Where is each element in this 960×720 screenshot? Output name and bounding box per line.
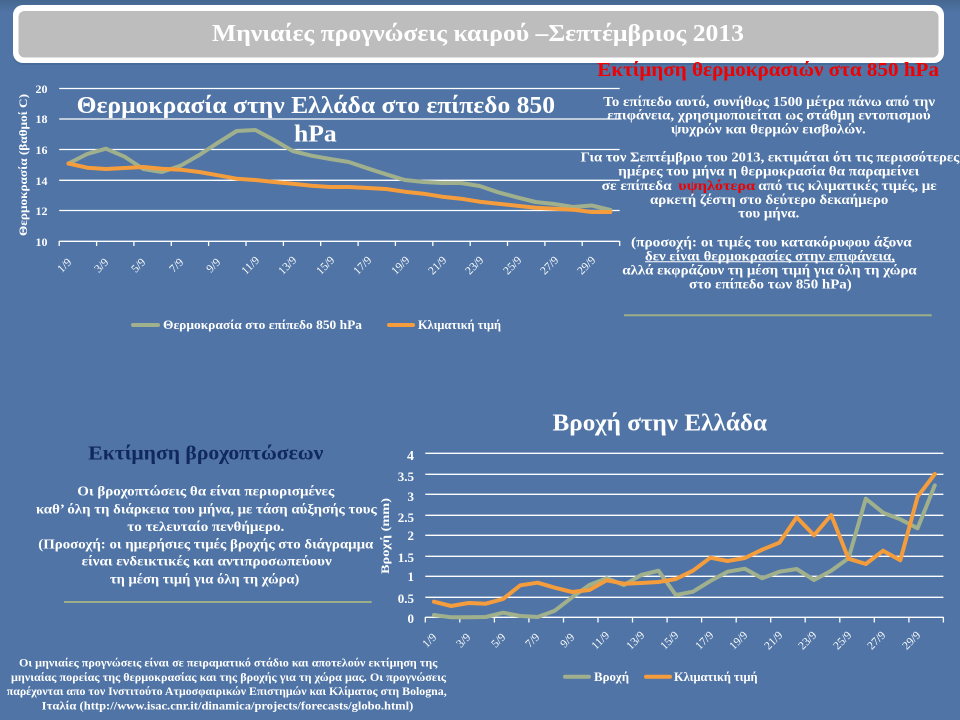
climatology line (temperature) [68, 164, 610, 212]
rainfall paragraph: τη μέση τιμή για όλη τη χώρα) [110, 572, 300, 587]
rainfall x axis labels: 25/9 [831, 629, 855, 652]
temperature x axis labels: 29/9 [575, 254, 599, 277]
temperature y axis labels: 14 [36, 174, 48, 188]
rainfall paragraph: το τελευταίο πενθήμερο. [127, 520, 284, 535]
paragraph: September 2013 outlook: ημέρες του μήνα η θερμοκρασία θα παραμείνει [618, 165, 920, 180]
rainfall y axis labels: 1.5 [398, 550, 414, 565]
rainfall y axis labels: 0 [408, 611, 414, 626]
temperature legend [133, 318, 501, 332]
title banner [13, 5, 944, 65]
paragraph: axis caution note: αλλά εκφράζουν τη μέση τιμή για όλη τη χώρα [622, 264, 917, 279]
temperature x axis labels: 15/9 [314, 254, 338, 277]
panel: rainfall estimate text [36, 442, 378, 587]
rainfall x axis labels: 19/9 [727, 629, 751, 652]
rainfall x axis labels: 5/9 [489, 631, 508, 650]
temperature y axis title: Θερμοκρασία (βαθμοί C) [16, 94, 30, 236]
temperature legend: Κλιματική τιμή [418, 318, 501, 332]
rainfall x axis labels: 1/9 [420, 631, 439, 650]
temperature x axis labels: 5/9 [129, 256, 148, 275]
rainfall x axis labels: 11/9 [590, 629, 612, 652]
paragraph: axis caution note: (προσοχή: οι τιμές του κατακόρυφου άξονα [631, 236, 912, 251]
temperature y axis labels: 10 [36, 235, 48, 249]
temperature x axis labels: 7/9 [167, 256, 186, 275]
rainfall y axis labels: 2.5 [398, 510, 414, 525]
paragraph: September 2013 outlook: του μήνα. [738, 207, 799, 222]
rainfall y axis labels: 3.5 [398, 469, 414, 484]
paragraph: axis caution note [622, 236, 917, 292]
paragraph: axis caution note: δεν είναι θερμοκρασίες στην επιφάνεια, [645, 249, 895, 264]
rainfall heading: Εκτίμηση βροχοπτώσεων [88, 442, 323, 464]
rainfall x axis labels: 21/9 [762, 629, 786, 652]
rainfall paragraph: καθ’ όλη τη διάρκεια του μήνα, με τάση αύξησής τους [36, 502, 378, 517]
temperature chart [16, 82, 620, 332]
temperature gridlines and axis [59, 88, 620, 246]
footer note: Οι μηνιαίες προγνώσεις είναι σε πειραματικό στάδιο και αποτελούν εκτίμηση της [19, 656, 438, 670]
rainfall x axis labels: 7/9 [523, 631, 542, 650]
temperature x axis labels: 9/9 [204, 256, 223, 275]
rainfall y axis title: Βροχή (mm) [378, 498, 392, 574]
rainfall line [434, 485, 935, 617]
paragraph: September 2013 outlook: από τις κλιματικές τιμές, με [758, 179, 937, 194]
rainfall y axis labels: 1 [408, 569, 414, 584]
rainfall paragraph: (Προσοχή: οι ημερήσιες τιμές βροχής στο διάγραμμα [38, 537, 373, 552]
climatology line (rainfall) [434, 474, 935, 606]
rainfall y axis labels [398, 449, 414, 626]
temperature x axis labels: 1/9 [55, 256, 74, 275]
temperature x axis labels: 21/9 [426, 254, 450, 277]
title text: Μηνιαίες προγνώσεις καιρού –Σεπτέμβριος 2013 [212, 21, 744, 47]
temperature x axis labels: 3/9 [92, 256, 111, 275]
rainfall x axis labels: 3/9 [454, 631, 473, 650]
paragraph: September 2013 outlook: σε επίπεδα [602, 179, 672, 194]
temperature x axis labels: 13/9 [276, 254, 300, 277]
rainfall x axis labels: 23/9 [796, 629, 820, 652]
rainfall paragraph: Οι βροχοπτώσεις θα είναι περιορισμένες [77, 485, 335, 500]
footer note: μηνιαίας πορείας της θερμοκρασίας και της βροχής για τη χώρα μας. Οι προγνώσεις [11, 670, 447, 684]
footer note: Ιταλία (http://www.isac.cnr.it/dinamica/projects/forecasts/globo.html) [42, 698, 413, 712]
temperature legend: Θερμοκρασία στο επίπεδο 850 hPa [163, 318, 363, 332]
rainfall x axis labels: 29/9 [900, 629, 924, 652]
temperature x axis labels: 23/9 [463, 254, 487, 277]
temperature y axis labels: 20 [36, 82, 48, 96]
rainfall x axis labels: 17/9 [693, 629, 717, 652]
temperature x axis labels: 27/9 [538, 254, 562, 277]
paragraph: the 850 hPa level [603, 95, 936, 137]
rainfall y axis labels: 4 [407, 449, 414, 464]
paragraph: September 2013 outlook: υψηλότερα [678, 179, 755, 194]
rainfall y axis labels: 0.5 [398, 591, 414, 606]
rainfall x axis labels: 9/9 [558, 631, 577, 650]
rainfall x axis labels: 13/9 [624, 629, 648, 652]
rainfall x axis labels [420, 629, 924, 652]
rainfall paragraph [36, 485, 378, 587]
temperature x axis labels: 17/9 [351, 254, 375, 277]
temperature y axis labels [36, 82, 48, 249]
rainfall chart [378, 411, 943, 684]
paragraph: September 2013 outlook [581, 151, 960, 222]
temperature line [68, 130, 610, 210]
rainfall legend: Βροχή [594, 670, 629, 684]
paragraph: axis caution note: στο επίπεδο των 850 hPa) [689, 277, 852, 292]
rainfall gridlines and axis [425, 453, 943, 622]
temperature y axis labels: 18 [36, 112, 48, 126]
temperature y axis labels: 16 [36, 143, 48, 157]
rainfall y axis labels: 2 [408, 528, 414, 543]
paragraph: September 2013 outlook: αρκετή ζέστη στο δεύτερο δεκαήμερο [650, 193, 888, 208]
footer note: παρέχονται απο τον Ινστιτούτο Ατμοσφαιρικών Επιστημών και Κλίματος στη Bologna, [7, 684, 447, 698]
temperature x axis labels: 25/9 [501, 254, 525, 277]
paragraph: the 850 hPa level: επιφάνεια, χρησιμοποιείται ως στάθμη εντοπισμού [607, 108, 931, 123]
temperature x axis labels: 19/9 [389, 254, 413, 277]
rainfall legend: Κλιματική τιμή [674, 670, 758, 684]
paragraph: the 850 hPa level: Το επίπεδο αυτό, συνήθως 1500 μέτρα πάνω από την [603, 95, 936, 110]
rainfall paragraph: είναι ενδεικτικές και αντιπροσωπεύουν [82, 555, 332, 570]
paragraph: the 850 hPa level: ψυχρών και θερμών εισβολών. [671, 122, 866, 137]
temperature x axis labels [55, 254, 599, 277]
rainfall chart title: Βροχή στην Ελλάδα [552, 411, 768, 437]
rainfall y axis labels: 3 [408, 489, 414, 504]
temperature chart title [77, 93, 555, 148]
rainfall x axis labels: 15/9 [658, 629, 682, 652]
rainfall legend [565, 670, 758, 684]
footer note [7, 656, 447, 712]
temperature chart title: hPa [294, 122, 337, 148]
temperature chart title: Θερμοκρασία στην Ελλάδα στο επίπεδο 850 [77, 93, 555, 119]
temperature x axis labels: 11/9 [240, 254, 262, 277]
paragraph: September 2013 outlook: Για τον Σεπτέμβριο του 2013, εκτιμάται ότι τις περισσότερες [581, 151, 960, 166]
temperature y axis labels: 12 [36, 204, 48, 218]
rainfall x axis labels: 27/9 [865, 629, 889, 652]
red heading: Εκτίμηση θερμοκρασιών στα 850 hPa [597, 59, 939, 81]
panel: temperature estimate text [581, 59, 960, 292]
